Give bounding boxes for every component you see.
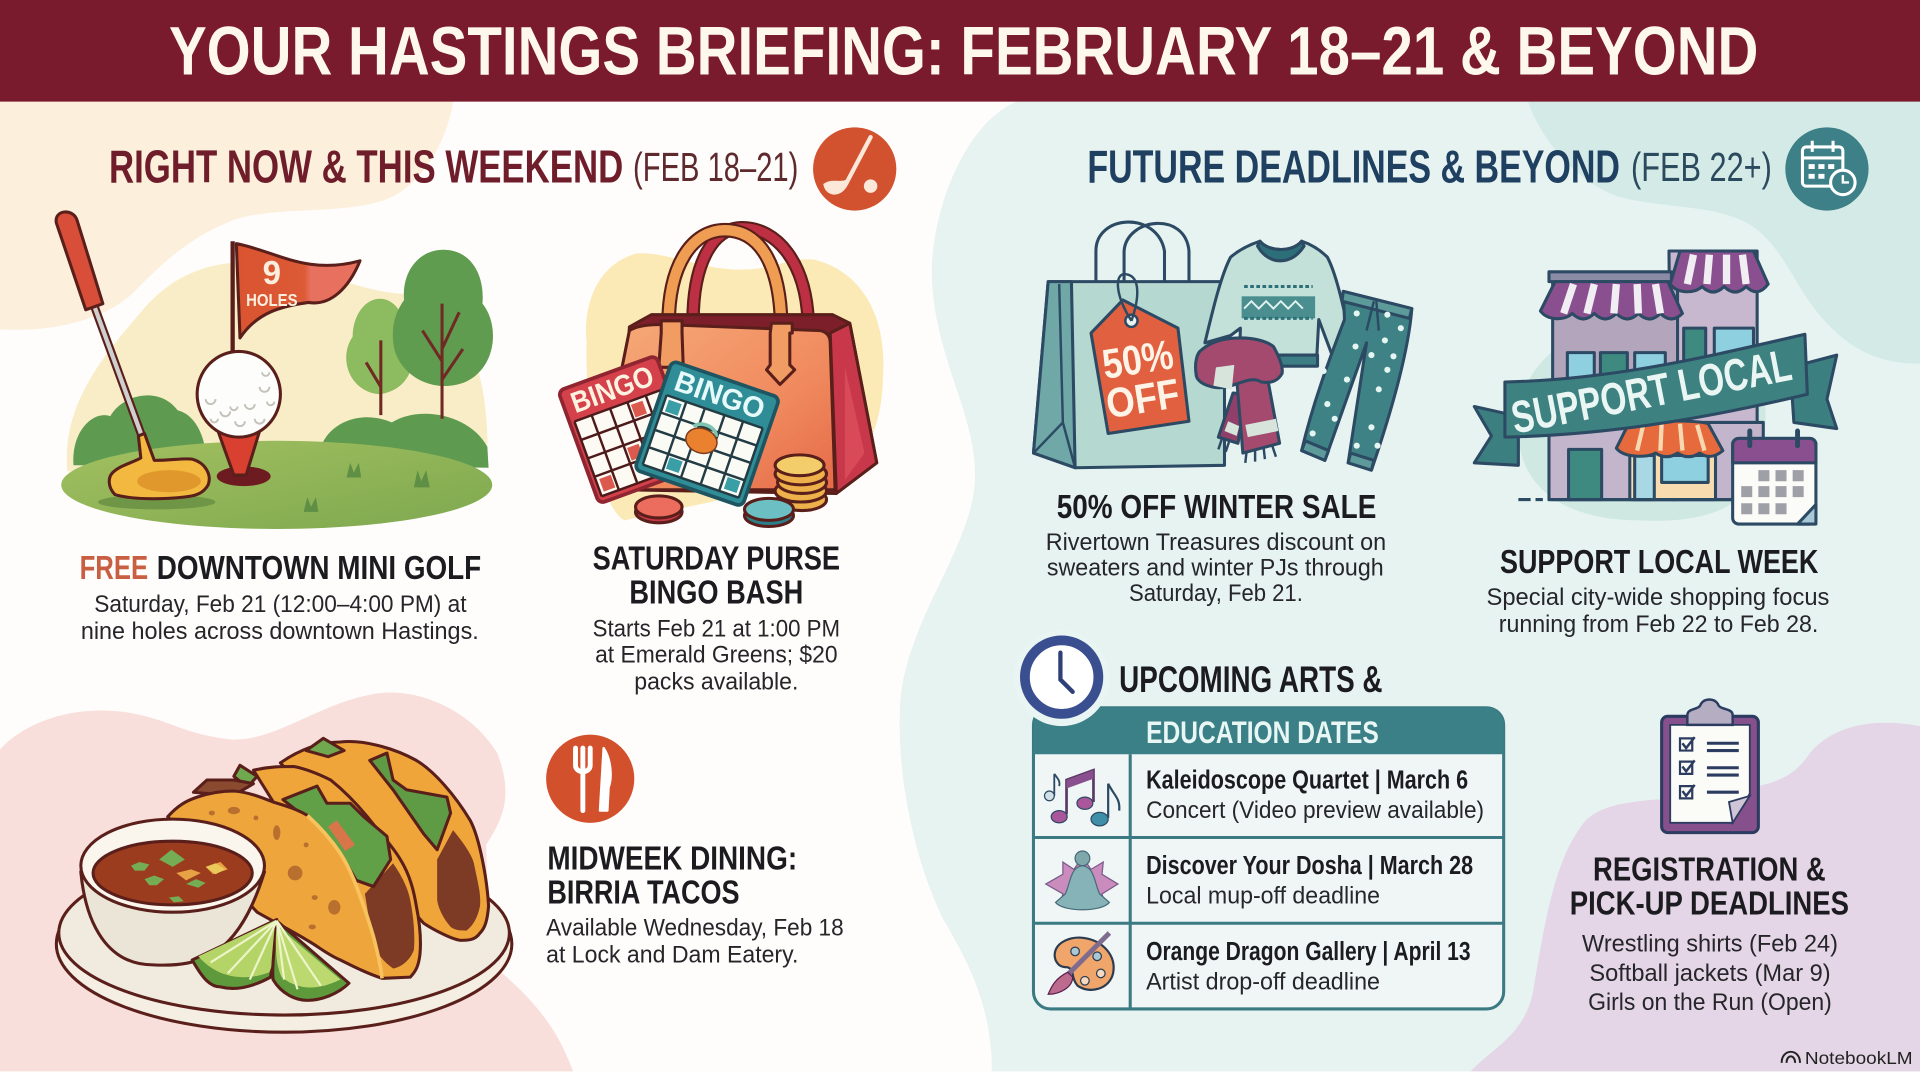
illustration: winter sale bag and clothes — [1033, 222, 1412, 470]
icon: golf club badge — [813, 127, 896, 211]
bushes — [73, 395, 489, 468]
background blob: teal right panel — [900, 102, 1920, 1071]
scarf — [1196, 338, 1282, 463]
text: midweek dining: MIDWEEK DINING: — [547, 840, 797, 877]
background blob: cream top left — [0, 102, 453, 330]
support local banner: SUPPORT LOCAL — [1507, 339, 1796, 443]
row 3: orange dragon gallery — [1048, 933, 1471, 995]
text: free downtown mini golf: Saturday, Feb 21 (12:00–4:00 PM) at — [94, 591, 467, 618]
illustration: mini golf scene — [56, 212, 493, 529]
strap tabs — [659, 321, 795, 384]
icon: clipboard checklist — [1662, 699, 1758, 833]
yellow hill backdrop — [67, 262, 488, 471]
text: support local week — [1487, 544, 1829, 638]
text: saturday purse bingo bash: BINGO BASH — [629, 575, 803, 612]
price tag: 50% — [1099, 330, 1176, 388]
row 1: kaleidoscope quartet: Kaleidoscope Quartet | March 6 — [1146, 767, 1468, 795]
handles — [669, 228, 808, 324]
table header text: EDUCATION DATES — [1146, 714, 1379, 750]
yellow backdrop — [586, 253, 883, 520]
row 1: kaleidoscope quartet — [1044, 767, 1484, 826]
support local banner — [1474, 334, 1837, 465]
text: midweek dining: at Lock and Dam Eatery. — [546, 941, 798, 968]
text: saturday purse bingo bash: packs available. — [634, 668, 798, 695]
text: free downtown mini golf — [80, 550, 481, 645]
green — [61, 441, 492, 529]
sweater — [1205, 241, 1357, 366]
price tag: OFF — [1103, 369, 1183, 427]
flag with nine holes label: HOLES — [246, 290, 298, 310]
panel: arts and education table — [1014, 631, 1504, 1009]
text: registration and pick-up deadlines: Girls on the Run (Open) — [1588, 989, 1832, 1016]
text: support local week: running from Feb 22 to Feb 28. — [1499, 611, 1818, 638]
row 1: kaleidoscope quartet: Concert (Video preview available) — [1146, 797, 1484, 824]
text: midweek dining: BIRRIA TACOS — [547, 875, 740, 912]
front taco — [168, 791, 382, 978]
text: saturday purse bingo bash: SATURDAY PURSE — [593, 540, 840, 577]
text: winter sale: sweaters and winter PJs through — [1047, 554, 1384, 581]
row 2: discover your dosha: Local mup-off deadline — [1146, 883, 1380, 910]
title banner — [0, 0, 1920, 102]
tee — [217, 431, 271, 486]
bingo card teal: BINGO — [670, 365, 769, 426]
background blob: lavender bottom right — [1471, 723, 1920, 1071]
text: winter sale — [1046, 489, 1386, 607]
text: saturday purse bingo bash — [593, 540, 840, 695]
meat behind front taco — [193, 780, 253, 796]
heading: right now and this weekend: RIGHT NOW & THIS WEEKEND — [109, 140, 623, 192]
text: registration and pick-up deadlines: PICK-UP DEADLINES — [1570, 886, 1849, 923]
text: saturday purse bingo bash: at Emerald Greens; $20 — [595, 641, 838, 668]
illustration: support local storefronts — [1474, 251, 1837, 524]
bag body — [618, 315, 877, 493]
back taco — [280, 738, 489, 940]
text: support local week: SUPPORT LOCAL WEEK — [1500, 544, 1818, 581]
pajama pants — [1302, 291, 1412, 470]
buildings — [1549, 251, 1757, 500]
heading: future deadlines and beyond: (FEB 22+) — [1631, 144, 1772, 190]
bingo card red: BINGO — [566, 360, 658, 420]
text: winter sale: 50% OFF WINTER SALE — [1057, 489, 1376, 526]
golf ball — [197, 351, 280, 437]
table frame — [1033, 708, 1504, 1009]
illustration: birria tacos plate — [56, 738, 512, 1032]
text: free downtown mini golf: FREE — [80, 550, 148, 587]
icon: fork and knife badge — [546, 735, 634, 823]
illustration: purse and bingo — [558, 228, 883, 527]
text: registration and pick-up deadlines: REGISTRATION & — [1593, 851, 1826, 888]
row 3: orange dragon gallery: Artist drop-off deadline — [1146, 968, 1380, 995]
background blob: teal behind stores — [1518, 329, 1766, 521]
poker chips — [636, 496, 793, 527]
text: winter sale: Saturday, Feb 21. — [1129, 580, 1303, 607]
lower building and shop — [1518, 421, 1763, 500]
text: registration and pick-up deadlines: Wrestling shirts (Feb 24) — [1582, 930, 1838, 957]
text: support local week: Special city-wide shopping focus — [1487, 584, 1829, 611]
text: midweek dining — [546, 840, 844, 968]
plate — [56, 851, 512, 1032]
text: registration and pick-up deadlines: Softball jackets (Mar 9) — [1589, 960, 1831, 987]
text: midweek dining: Available Wednesday, Feb 18 — [546, 914, 844, 941]
bingo card red — [558, 355, 697, 504]
lime wedges — [192, 920, 349, 1000]
row 2: discover your dosha — [1046, 851, 1473, 910]
heading: right now and this weekend: (FEB 18–21) — [633, 144, 798, 190]
awnings — [1540, 251, 1768, 319]
background blob: pink bottom left — [0, 693, 573, 1071]
watermark: NotebookLM: NotebookLM — [1805, 1048, 1913, 1068]
bingo card teal — [635, 361, 780, 507]
coin stack — [775, 455, 827, 511]
text: winter sale: Rivertown Treasures discount on — [1046, 529, 1386, 556]
calendar — [1733, 431, 1816, 524]
light tree — [346, 299, 413, 415]
middle taco — [234, 765, 420, 978]
flag with nine holes label — [233, 241, 360, 358]
shopping bag — [1033, 222, 1224, 468]
clock icon — [1014, 631, 1109, 726]
text: registration and pick-up deadlines — [1570, 851, 1849, 1016]
icon: calendar clock badge — [1785, 127, 1869, 211]
putter — [56, 212, 216, 509]
row 2: discover your dosha: Discover Your Dosha | March 28 — [1146, 852, 1473, 880]
heading: future deadlines and beyond: FUTURE DEADLINES & BEYOND — [1087, 140, 1620, 192]
text: saturday purse bingo bash: Starts Feb 21 at 1:00 PM — [593, 616, 840, 643]
flag with nine holes label: 9 — [263, 255, 281, 292]
heading: upcoming arts: UPCOMING ARTS & — [1119, 659, 1382, 700]
salsa bowl — [81, 819, 264, 965]
text: free downtown mini golf: DOWNTOWN MINI GOLF — [157, 550, 481, 587]
text: free downtown mini golf: nine holes across downtown Hastings. — [81, 618, 479, 645]
background blob: darker teal top right — [1528, 102, 1920, 364]
price tag — [1091, 274, 1189, 433]
row 3: orange dragon gallery: Orange Dragon Gallery | April 13 — [1146, 938, 1471, 966]
dark tree — [393, 250, 493, 419]
